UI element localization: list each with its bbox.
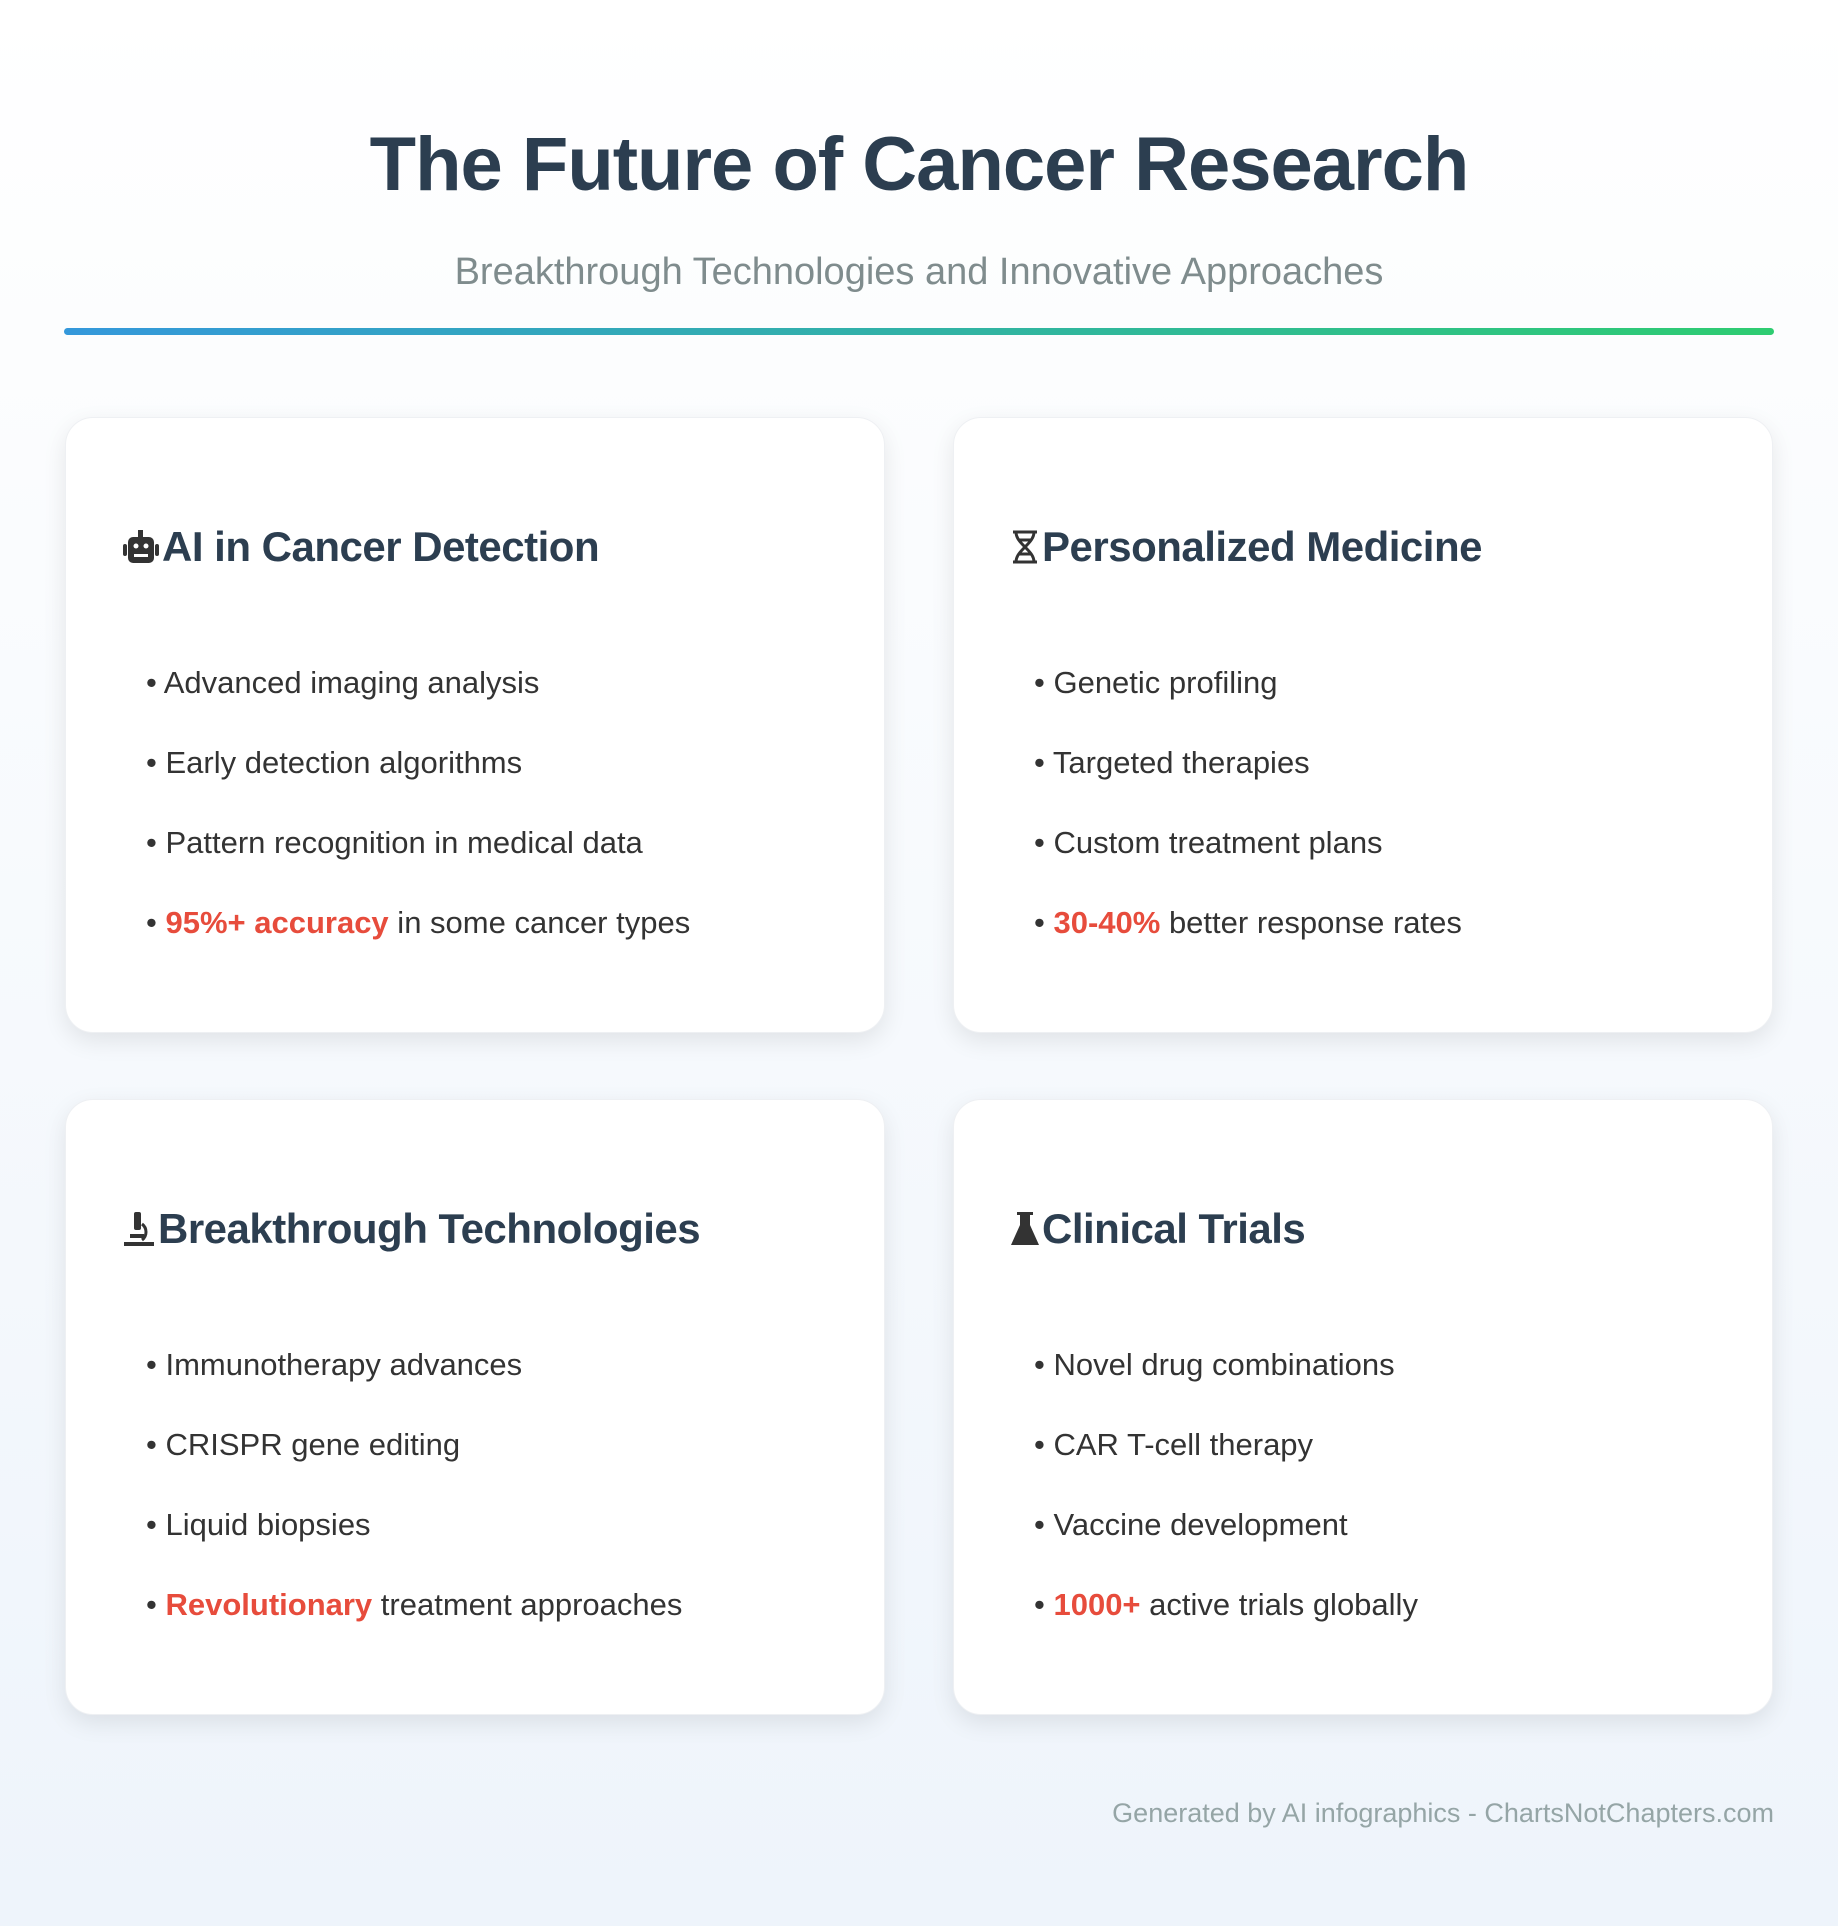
heading: Personalized Medicine: Personalized Medicine <box>1042 523 1482 570</box>
bullet list: • Custom treatment plans <box>1034 825 1383 860</box>
panel: AI in Cancer Detection <box>65 417 885 1033</box>
bullet list: • CAR T-cell therapy <box>1034 1427 1313 1462</box>
bullet list: • Pattern recognition in medical data <box>146 825 643 860</box>
panel: Breakthrough Technologies <box>65 1099 885 1715</box>
bullet list <box>146 1347 682 1622</box>
bullet list: • Novel drug combinations <box>1034 1347 1395 1382</box>
bullet list: • 1000+ active trials globally <box>1034 1587 1418 1622</box>
heading: Clinical Trials: Clinical Trials <box>1042 1205 1305 1252</box>
footer: Generated by AI infographics - ChartsNotChapters.com <box>1112 1798 1774 1828</box>
title: The Future of Cancer Research <box>370 122 1468 207</box>
panel: Clinical Trials <box>953 1099 1773 1715</box>
bullet list: • Revolutionary treatment approaches <box>146 1587 682 1622</box>
subtitle: Breakthrough Technologies and Innovative Approaches <box>455 251 1383 293</box>
bullet list <box>146 665 690 940</box>
bullet list: • Vaccine development <box>1034 1507 1348 1542</box>
heading: AI in Cancer Detection: AI in Cancer Detection <box>162 523 599 570</box>
panel: Personalized Medicine <box>953 417 1773 1033</box>
bullet list: • 30-40% better response rates <box>1034 905 1462 940</box>
heading: Breakthrough Technologies: Breakthrough Technologies <box>158 1205 700 1252</box>
bullet list: • 95%+ accuracy in some cancer types <box>146 905 690 940</box>
bullet list <box>1034 1347 1418 1622</box>
bullet list: • Advanced imaging analysis <box>146 665 539 700</box>
bullet list: • Liquid biopsies <box>146 1507 371 1542</box>
bullet list: • Genetic profiling <box>1034 665 1277 700</box>
bullet list: • Targeted therapies <box>1034 745 1310 780</box>
bullet list: • CRISPR gene editing <box>146 1427 460 1462</box>
bullet list: • Immunotherapy advances <box>146 1347 522 1382</box>
bullet list: • Early detection algorithms <box>146 745 522 780</box>
bullet list <box>1034 665 1462 940</box>
